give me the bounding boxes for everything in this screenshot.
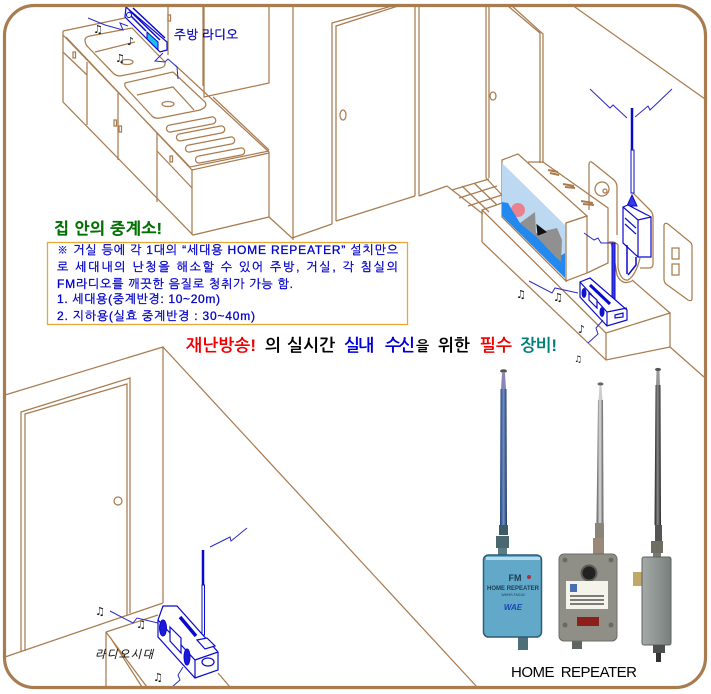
product: side view repeater — [633, 368, 671, 662]
music notes: ♫ — [115, 52, 125, 65]
music notes — [93, 23, 585, 684]
upper room walls and doors — [269, 5, 705, 238]
music notes: ♫ — [516, 288, 526, 301]
headline: 실내 — [344, 336, 374, 355]
headline: 위한 — [438, 336, 470, 355]
headline: 수신 — [385, 336, 415, 355]
kitchen illustration — [63, 6, 293, 240]
product name caption: HOME REPEATER — [511, 664, 637, 681]
product: blue repeater — [484, 369, 542, 650]
living room radio — [529, 233, 627, 343]
music notes: ♫ — [574, 355, 582, 365]
music notes: ♪ — [578, 323, 585, 336]
lower room radio — [110, 528, 247, 687]
tv and stand — [482, 154, 704, 377]
headline: 필수 — [480, 336, 512, 355]
music notes: ♫ — [136, 618, 146, 631]
description box: 1. 세대용(중계반경: 10~20m) — [57, 292, 220, 306]
product: blue repeater: WMHR-FM100 — [501, 593, 525, 597]
music notes: ♫ — [95, 605, 105, 618]
description box: 2. 지하용(실효 중계반경 : 30~40m) — [57, 309, 255, 323]
relay heading: 집 안의 중계소! — [54, 220, 162, 238]
product: blue repeater: WAE — [504, 603, 523, 612]
lower room — [5, 347, 477, 687]
music notes: ♪ — [127, 35, 134, 48]
product: silver repeater back — [559, 382, 617, 649]
description box: 로 세대내의 난청을 해소할 수 있어 주방, 거실, 각 침실의 — [57, 260, 398, 274]
kitchen radio — [88, 7, 178, 79]
music notes: ♫ — [553, 291, 563, 304]
product: blue repeater: HOME REPEATER — [487, 586, 540, 592]
description box — [48, 242, 408, 324]
headline: 의 — [265, 336, 281, 355]
headline — [186, 336, 557, 355]
repeater on wall — [590, 89, 672, 275]
headline: 실시간 — [287, 336, 335, 355]
product: blue repeater: FM — [508, 573, 522, 583]
music notes: ♫ — [93, 23, 103, 36]
description box: ※ 거실 등에 각 1대의 “세대용 HOME REPEATER” 설치만으 — [57, 243, 398, 257]
description box: FM라디오를 깨끗한 음질로 청취가 가능 함. — [57, 277, 293, 291]
music notes: ♫ — [153, 671, 163, 684]
headline: 재난방송! — [186, 336, 256, 355]
wall outlets — [589, 162, 692, 301]
kitchen radio label: 주방 라디오 — [174, 28, 238, 42]
radio stand label: 라디오시대 — [95, 648, 155, 661]
headline: 장비! — [520, 336, 557, 355]
headline: 을 — [416, 338, 429, 354]
